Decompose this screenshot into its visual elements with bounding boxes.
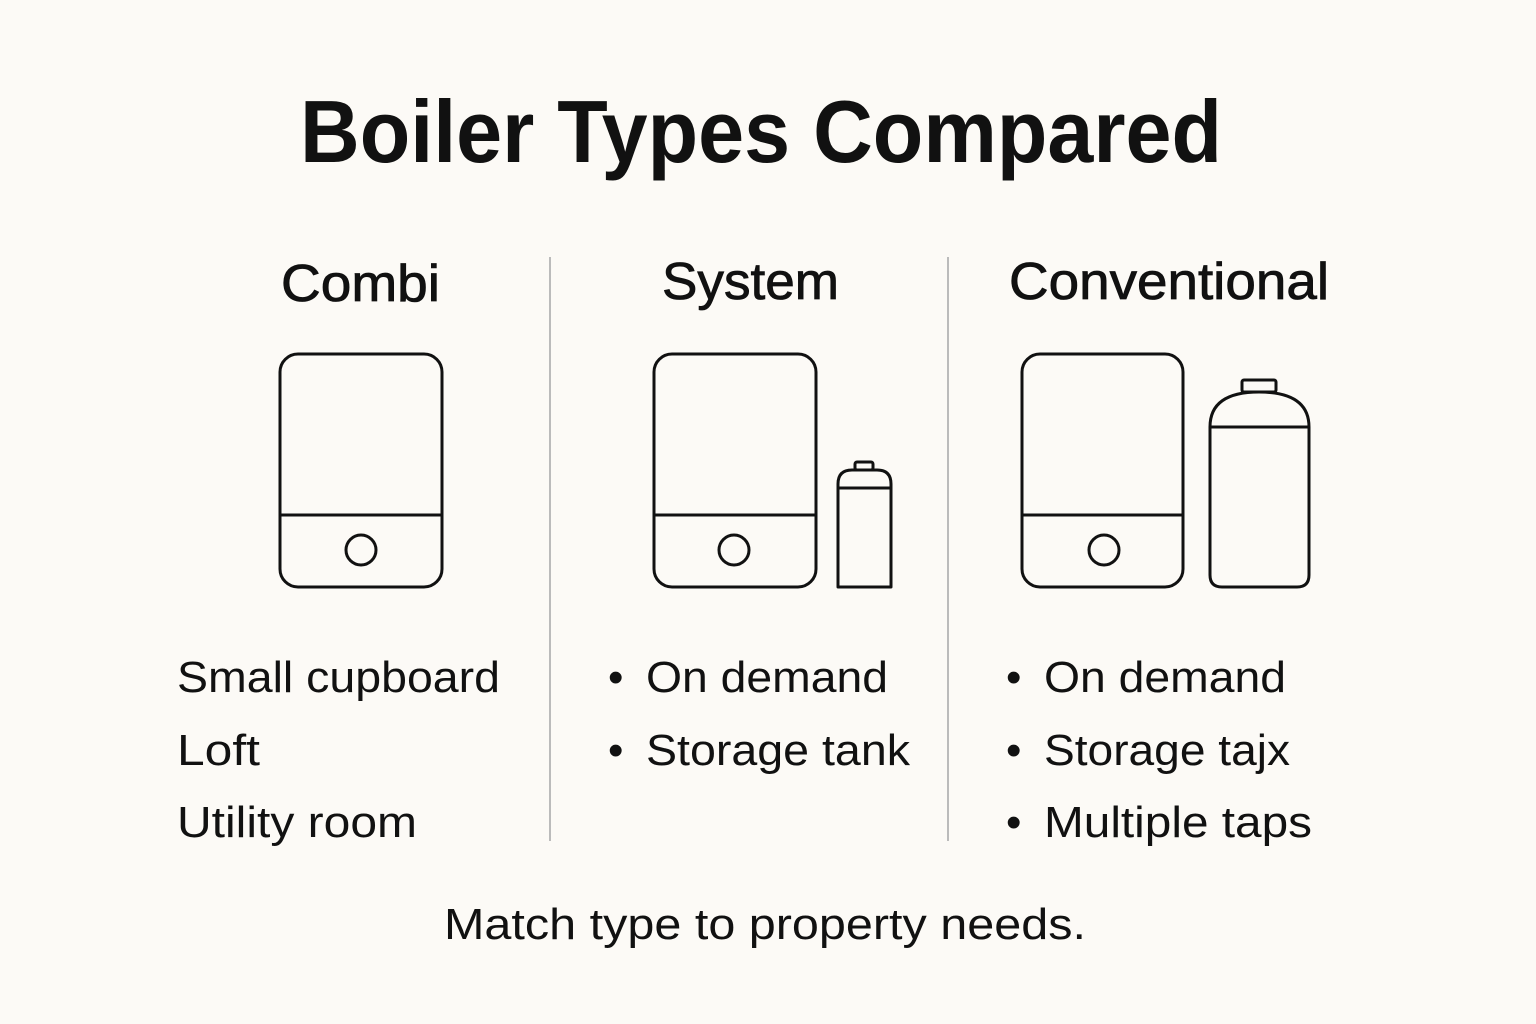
- heading: System: System: [662, 253, 839, 311]
- heading: Combi: Combi: [281, 255, 440, 313]
- footer text: Match type to property needs.: [444, 900, 1086, 949]
- text: combi locations: [177, 653, 500, 847]
- text: system features: [608, 653, 911, 775]
- icon: combi boiler: [280, 354, 442, 587]
- text: system features: On demand: [646, 653, 888, 702]
- text: combi locations: Loft: [177, 726, 260, 775]
- title: Boiler Types Compared: [300, 82, 1222, 181]
- heading: Conventional: Conventional: [1009, 253, 1329, 311]
- panel: combi: [177, 255, 500, 847]
- text: combi locations: Utility room: [177, 798, 417, 847]
- text: system features: •: [608, 653, 623, 702]
- text: system features: •: [608, 726, 623, 775]
- text: conventional features: Storage tajx: [1044, 726, 1290, 775]
- text: conventional features: [1006, 653, 1312, 847]
- text: conventional features: •: [1006, 653, 1021, 702]
- icon: conventional boiler with tank: [1022, 354, 1309, 587]
- text: conventional features: •: [1006, 798, 1021, 847]
- text: conventional features: Multiple taps: [1044, 798, 1312, 847]
- panel: system: [608, 253, 911, 775]
- text: system features: Storage tank: [646, 726, 911, 775]
- icon: system boiler with tank: [654, 354, 891, 587]
- text: conventional features: •: [1006, 726, 1021, 775]
- text: conventional features: On demand: [1044, 653, 1286, 702]
- panel: conventional: [1006, 253, 1329, 847]
- text: combi locations: Small cupboard: [177, 653, 500, 702]
